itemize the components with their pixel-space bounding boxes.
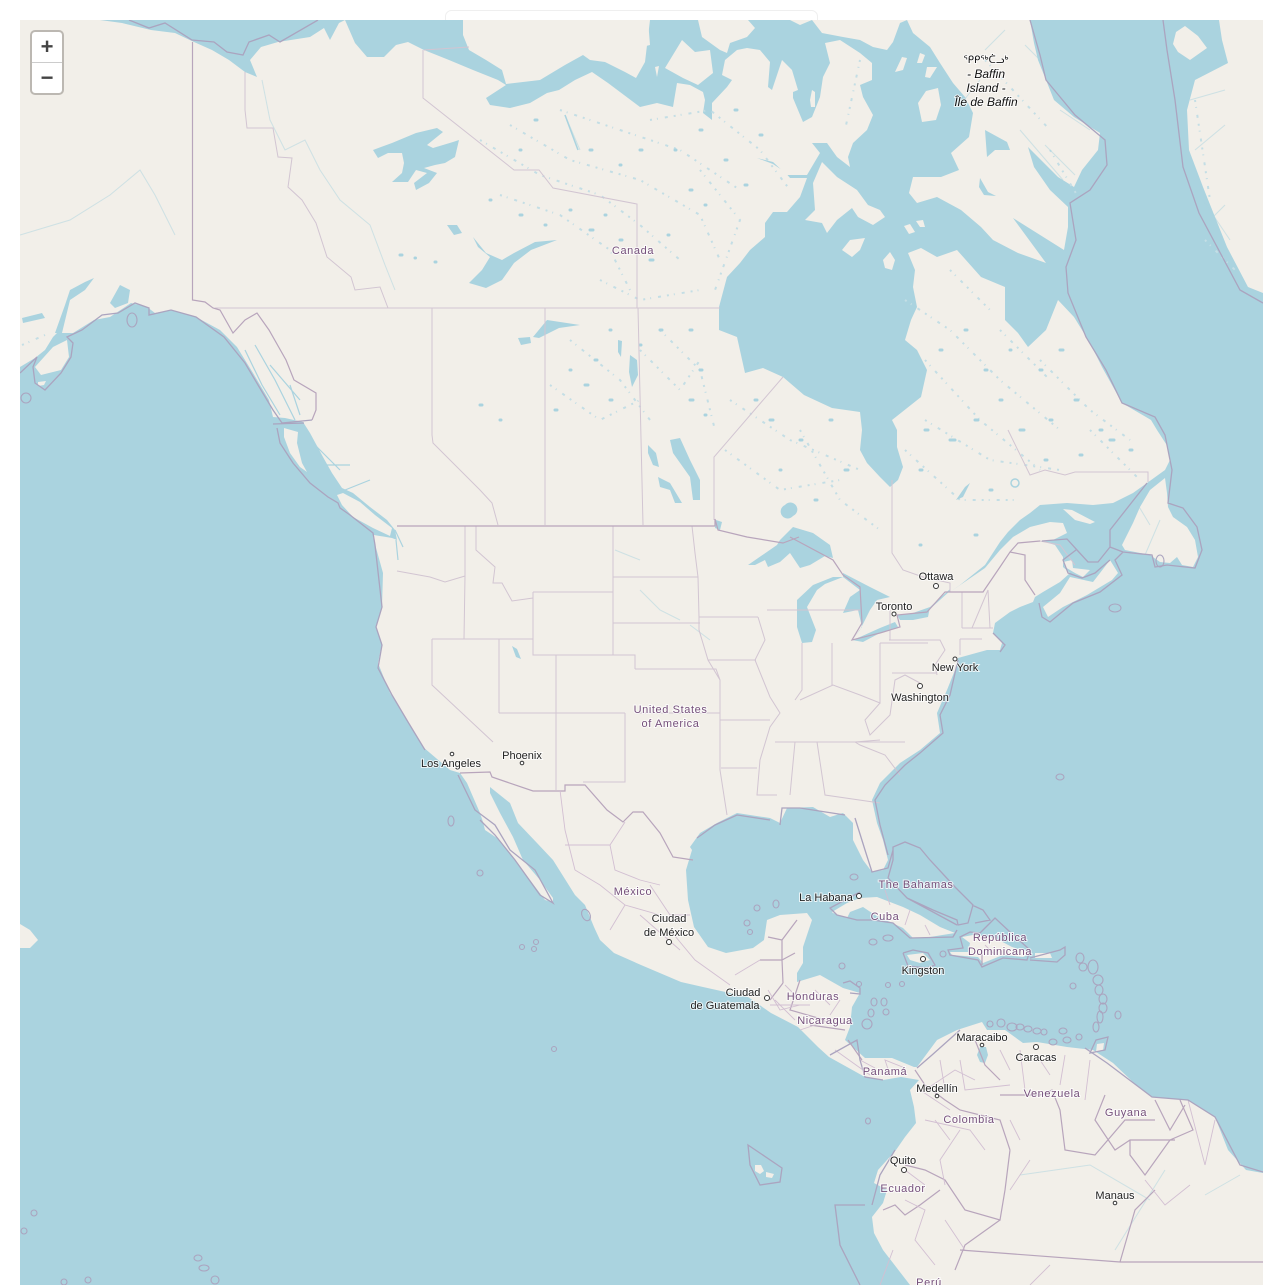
Hispaniola <box>950 935 1032 963</box>
state and province borders <box>215 47 1148 815</box>
country labels: Panamá <box>863 1066 908 1078</box>
Foxe Basin islands <box>647 30 937 107</box>
Baffin Island label <box>954 53 1018 109</box>
Great Bear Lake <box>373 128 459 190</box>
Baffin Island label: - Baffin <box>967 67 1005 81</box>
city labels: Toronto <box>876 601 912 613</box>
Trinidad and Pacific islands <box>20 924 1104 1052</box>
city labels: Ciudad <box>726 987 760 999</box>
country labels: Guyana <box>1105 1107 1147 1119</box>
city markers <box>450 584 1117 1205</box>
city labels: de Guatemala <box>690 1000 760 1012</box>
Nova Scotia and Cape Breton <box>1043 560 1118 617</box>
city labels: Kingston <box>902 965 944 977</box>
country labels: México <box>614 886 652 898</box>
search box edge <box>446 10 818 40</box>
country labels: Honduras <box>787 991 839 1003</box>
Baffin Island label: ᕿᑭᖅᑖᓗᒃ <box>964 53 1008 66</box>
city labels: Maracaibo <box>956 1032 1008 1044</box>
country labels <box>612 245 1147 1285</box>
country labels: The Bahamas <box>878 879 954 891</box>
country labels: Ecuador <box>880 1183 926 1195</box>
city labels <box>421 571 1135 1202</box>
Vancouver Island <box>337 493 392 536</box>
country labels: Colombia <box>943 1114 995 1126</box>
Lake Winnipeg <box>670 438 700 500</box>
Great Slave Lake <box>469 237 557 288</box>
country labels: República <box>973 932 1027 944</box>
zoom out button: − <box>41 65 53 90</box>
city labels: Ottawa <box>919 571 954 583</box>
country labels: Cuba <box>871 911 900 923</box>
Lake Athabasca <box>518 320 580 345</box>
Baffin Island <box>812 20 1100 263</box>
Cuba <box>832 897 955 938</box>
city labels: New York <box>932 662 979 674</box>
Lake Superior <box>748 527 833 568</box>
city labels: de México <box>644 927 694 939</box>
Lake Michigan <box>797 577 843 643</box>
Baffin Island label: Island - <box>966 81 1006 95</box>
Lake Erie <box>852 622 898 642</box>
Disko Island and Greenland <box>1173 20 1263 293</box>
map labels <box>421 53 1147 1285</box>
zoom control <box>31 31 63 94</box>
Anticosti Island <box>1063 509 1095 524</box>
small lakes <box>400 110 1132 545</box>
city labels: Manaus <box>1095 1190 1135 1202</box>
Victoria Island <box>463 20 650 84</box>
city labels: La Habana <box>799 892 854 904</box>
Prince Edward Island <box>1063 560 1090 577</box>
city labels: Medellín <box>916 1083 958 1095</box>
country labels: of America <box>642 718 700 730</box>
Somerset Island <box>698 20 755 53</box>
country labels: Venezuela <box>1024 1088 1081 1100</box>
Galapagos Islands <box>755 1165 774 1178</box>
Southampton Island <box>805 162 885 233</box>
Nettilling and Amadjuak lakes <box>979 130 1010 196</box>
Manicouagan ring lake <box>1011 479 1019 487</box>
Caribbean and Pacific island outlines <box>21 313 1164 1285</box>
city labels: Phoenix <box>502 750 542 762</box>
Cook Inlet and Prince William Sound <box>22 278 130 333</box>
Mexico and Central/South America internal borders <box>560 790 1215 1285</box>
Lake Nipigon and Lake of the Woods <box>715 503 797 530</box>
Jamaica and Puerto Rico <box>907 953 1052 963</box>
King William area <box>665 40 713 85</box>
Newfoundland <box>1122 478 1198 567</box>
Hudson Strait islands <box>790 20 925 270</box>
Kodiak Island <box>35 340 69 386</box>
city labels: Washington <box>891 692 949 704</box>
country labels: United States <box>634 704 707 716</box>
city labels: Caracas <box>1016 1052 1057 1064</box>
city labels: Ciudad <box>652 913 686 925</box>
Haida Gwaii <box>284 428 307 472</box>
city labels: Los Angeles <box>421 758 481 770</box>
country labels: Dominicana <box>968 946 1032 958</box>
Northern Saskatchewan and Manitoba lakes <box>447 225 638 387</box>
Baffin Island label: Île de Baffin <box>954 94 1018 109</box>
country labels: Canada <box>612 245 654 257</box>
country labels: Nicaragua <box>797 1015 853 1027</box>
Lake Manitoba and Winnipegosis <box>648 445 682 503</box>
pale lake mottling <box>22 60 1235 530</box>
Lake Huron and Georgian Bay <box>843 573 890 640</box>
Lake Maracaibo and Great Salt Lake <box>512 646 988 1063</box>
Lake Saint-Jean <box>956 483 970 500</box>
Prince Charles Island <box>918 88 941 122</box>
zoom in button: + <box>41 34 53 59</box>
Lake Ontario <box>897 607 930 620</box>
city labels: Quito <box>890 1155 916 1167</box>
